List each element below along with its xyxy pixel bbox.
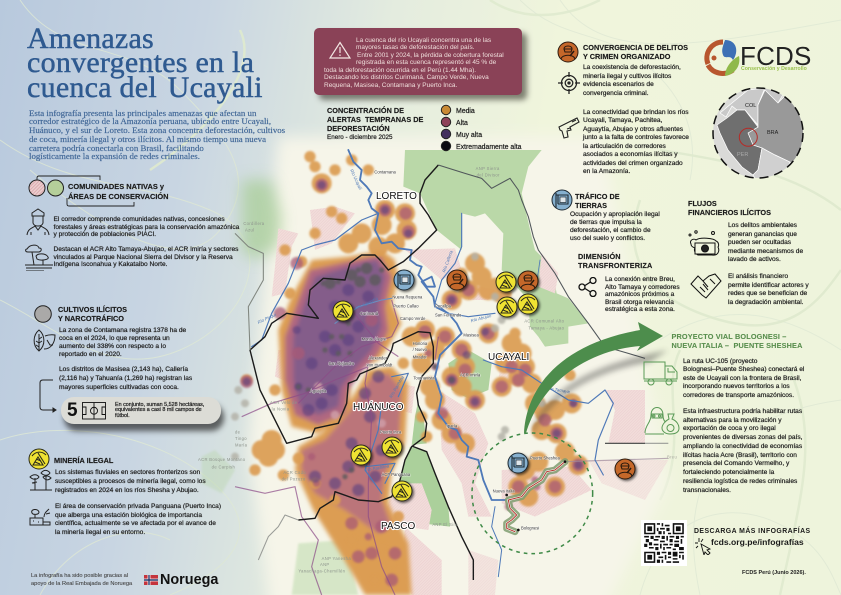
text: protected areas: Indígena Isconahua y Kakataibo Norte. (54, 261, 168, 268)
icon: cursor click (694, 537, 712, 555)
heading: CULTIVOS ILÍCITOS (58, 304, 127, 314)
map place labels: Iparía (447, 424, 458, 429)
text: infrastructure risks: exportación de coca y oro ilegal (683, 425, 776, 432)
heading: COMUNIDADES NATIVAS y (68, 182, 164, 191)
icon: handgun (558, 117, 580, 139)
region labels: LORETO (376, 191, 417, 202)
title (27, 22, 263, 104)
legend heading (327, 106, 424, 133)
dark grey clusters: extreme (298, 268, 452, 477)
alert surface (278, 250, 412, 595)
heading (688, 198, 771, 217)
panel: tráfico de tierras (550, 188, 670, 248)
text: land trafficking: Ocupación y apropiación ilegal (570, 210, 660, 218)
heading (58, 304, 127, 323)
intro text (29, 108, 285, 162)
text: sponsor: apoyo de la Real Embajada de Noruega (31, 580, 132, 586)
icon: indigenous person (26, 208, 50, 236)
text: cross-border: estratégica a esta zona. (605, 306, 675, 313)
map: deforestation alerts in the Ucayali basin: ANP (320, 562, 330, 567)
department borders (250, 165, 473, 580)
text: financial analysis: permite identificar actores y (728, 282, 809, 289)
intro text: de coca, minería ilegal y otros ilícitos. Al mismo tiempo una nueva (29, 134, 266, 144)
map: deforestation alerts in the Ucayali basin: Río Pachitea (364, 463, 390, 473)
panel: minería ilegal (28, 448, 221, 536)
markers: land trafficking (blue) (394, 270, 528, 473)
text: deforestation facts (324, 36, 504, 89)
map: deforestation alerts in the Ucayali basin: Tamaya - Abujao (528, 325, 565, 330)
logo mark (703, 38, 743, 78)
icon: football pitch (82, 402, 106, 420)
text: infrastructure risks: ampliando la conectividad de economías (683, 443, 802, 450)
rivers (252, 150, 613, 577)
text: infrastructure risks: ilícitas hacia Acre (Brasil), territorio con (683, 452, 797, 459)
panel: convergencia de delitos (558, 42, 689, 175)
map place labels: Contamana (374, 169, 397, 174)
panel: flujos financieros (685, 195, 835, 310)
text: laundering: lavado de activos. (728, 256, 781, 263)
icon: conservation station (30, 508, 50, 526)
text: infrastructure risks: presencia del Comando Vermelho, y (683, 460, 789, 467)
map place labels: San Fernando (435, 313, 462, 318)
text: Contamana (59, 327, 186, 358)
heading (583, 42, 688, 61)
text: deforestation facts: Requena, Masisea, Contamana y Puerto Inca. (324, 82, 457, 89)
text: cross-border: Alto Tamaya y corredores (605, 284, 680, 291)
legend: deforestation alerts (327, 104, 522, 152)
icon: overlapping circles with brackets (28, 176, 134, 206)
heading: MINERÍA ILEGAL (54, 456, 113, 464)
region labels (353, 191, 529, 532)
map place labels: Puerto Sheshea (530, 455, 560, 460)
heading: NUEVA ITALIA – PUENTE SHESHEA (672, 341, 802, 350)
map: deforestation alerts in the Ucayali basin: ACR Velo de (270, 400, 298, 405)
icon: truck (643, 361, 679, 387)
title: convergentes en la (27, 46, 254, 79)
base map tint (202, 137, 668, 595)
text: Contamana: La zona de Contamana registra 1378 ha de (59, 327, 186, 334)
icon: handshake (690, 273, 722, 299)
text: UC-105: Bolognesi–Puente Sheshea) conectará el (683, 366, 804, 373)
text: convergence (583, 64, 681, 97)
heading: PROYECTO VIAL BOLOGNESI – (672, 332, 786, 340)
text: infrastructure risks: transnacionales. (683, 487, 731, 494)
text: Panguana: que alberga una estación biológica de importancia (55, 512, 202, 518)
text: infrastructure risks: Esta infraestructura podría habilitar rutas (683, 408, 802, 415)
text: cross-border: La conexión entre Breu, (605, 276, 675, 283)
map: deforestation alerts in the Ucayali basin: de (235, 429, 241, 434)
text: cross-border (605, 276, 680, 314)
text: Contamana: aumento del 338% con respecto a lo (59, 343, 166, 350)
map place labels: ACP Panguana (382, 472, 411, 477)
text: convergence: minería ilegal y cultivos ilícitos (583, 73, 671, 80)
map: deforestation alerts in the Ucayali basin: Río Abujao (470, 313, 492, 323)
map place labels: Honoria (413, 341, 428, 346)
text: download heading: DESCARGA MÁS INFOGRAFÍAS (694, 528, 811, 534)
map: deforestation alerts in the Ucayali basin: ANP Yanesha (322, 556, 351, 561)
text: Contamana: coca en el 2024, lo que representa un (59, 335, 170, 342)
text: districts: Los distritos de Masisea (2,143 ha), Callería (59, 366, 188, 373)
text: total hectares: En conjunto, suman 5,528 hectáreas, (115, 402, 204, 408)
map place labels: Puerto Inca (380, 429, 402, 434)
map: deforestation alerts in the Ucayali basin: ANP El Sira (432, 522, 458, 527)
roads (235, 300, 668, 595)
legend heading: CONCENTRACIÓN DE (327, 106, 404, 114)
map: deforestation alerts in the Ucayali basin: Tingo (235, 436, 247, 441)
map place labels: San Alejandro (328, 361, 355, 366)
text: protected areas: Destacan el ACR Alto Tamaya-Abujao, el ACR Imiría y sectores (54, 246, 238, 253)
text: cross-border: Brasil otorga relevancia (605, 299, 674, 306)
map: deforestation alerts in the Ucayali basin: Azul (245, 228, 254, 233)
heading (672, 332, 802, 350)
legend date: Enero - diciembre 2025 (327, 134, 392, 141)
map: deforestation alerts in the Ucayali basin: Río Callería (441, 249, 454, 273)
text: protected areas: vinculados al Parque Nacional Sierra del Divisor y la Reserva (54, 254, 233, 261)
text: financial analysis: El análisis financiero (728, 273, 788, 280)
map place labels (310, 169, 560, 530)
legend labels: Alta (456, 120, 468, 126)
heading: FLUJOS (688, 198, 717, 208)
text: communities (53, 216, 240, 238)
region labels: HUÁNUCO (353, 400, 404, 413)
text: total hectares: fútbol. (115, 413, 130, 419)
logo wordmark: FCDS (740, 41, 812, 71)
text: connectivity: Aguaytía, Abujao y otros afluentes (583, 126, 683, 133)
Ucayali eastern frontier (235, 165, 668, 560)
text: UC-105: incorporando nuevos territorios a los (683, 383, 790, 390)
panel: comunidades nativas (25, 176, 240, 271)
text: Panguana: científica, actualmente se ve afectada por el avance de (55, 520, 216, 527)
text: infrastructure risks (683, 408, 802, 495)
map: deforestation alerts in the Ucayali basin: Río Tamaya (546, 385, 571, 394)
map: deforestation alerts in the Ucayali basin: Cordillera (243, 221, 265, 226)
map place labels: Campo Verde (400, 316, 426, 321)
purple clusters: muy alta (247, 185, 578, 490)
icon: land trafficking badge (551, 189, 573, 211)
map place labels: Nueva Requena (392, 294, 423, 299)
legend heading: ALERTAS TEMPRANAS DE (327, 115, 423, 124)
icon: target (558, 72, 580, 94)
text: Contamana: reportado en el 2020. (59, 351, 122, 358)
text: UC-105 (683, 358, 804, 400)
heading: ÁREAS DE CONSERVACIÓN (68, 192, 169, 201)
map: deforestation alerts in the Ucayali basin: del Pozuzo (282, 477, 306, 482)
icon: forest (25, 244, 53, 271)
map: regional locator (712, 87, 804, 179)
panel: proyecto vial (640, 330, 830, 495)
heading: DIMENSIÓN (578, 252, 621, 260)
text: laundering: pueden ser ocultadas (728, 239, 791, 246)
road: Bolognesi – Nueva Italia – Puerto Sheshea (507, 462, 565, 532)
text: connectivity: asociados a economías ilícitas y (583, 151, 678, 158)
text: deforestation facts: mayores tasas de deforestación del país. (356, 44, 475, 51)
heading: Y NARCOTRÁFICO (58, 314, 124, 323)
icon: grey circle (34, 305, 52, 323)
legend heading: DEFORESTACIÓN (327, 124, 390, 133)
panel: deforestation callout (314, 28, 522, 95)
heading: TRANSFRONTERIZA (578, 261, 652, 270)
text: cross-border: amazónicos próximos a (605, 291, 674, 298)
text: river mining: Los sistemas fluviales en sectores fronterizos son (55, 469, 200, 476)
icon: share network (578, 277, 598, 297)
title: Amenazas (27, 22, 154, 55)
heading: TIERRAS (575, 201, 607, 210)
map place labels: / Nuevo (413, 347, 428, 352)
map: deforestation alerts in the Ucayali basin: Breu (667, 454, 677, 459)
download call to action (690, 525, 815, 555)
map place labels: Alexander (368, 355, 388, 360)
text: total hectares: equivalentes a casi 8 mil campos de (115, 407, 202, 413)
number 5: 5 (67, 400, 78, 420)
text: connectivity: junto a la falta de controles favorece (583, 134, 689, 141)
text: sponsor (31, 572, 132, 586)
text: laundering: generan ganancias que (728, 231, 797, 238)
text: river mining (55, 469, 206, 494)
text: UC-105: La ruta UC-105 (proyecto (683, 358, 757, 364)
text: convergence: evidencia escenarios de (583, 81, 654, 88)
map place labels: Tournavista (413, 375, 435, 380)
heading: FINANCIEROS ILÍCITOS (688, 208, 771, 217)
map place labels: Monte Alegre (362, 337, 387, 342)
text: financial analysis: redes que se benefician de (728, 290, 807, 297)
map: regional locator: COL (745, 103, 756, 109)
map place labels: Bolognesi (521, 525, 539, 530)
heading (68, 182, 169, 201)
markers: mining (yellow) (333, 272, 538, 501)
arrow: road project to Brazil (524, 322, 668, 433)
text: Panguana: El área de conservación privada Panguana (Puerto Inca) (55, 503, 221, 510)
text: connectivity: en la Amazonía. (583, 168, 630, 175)
project area: dashed circle (472, 433, 593, 554)
arrow: bracket to football stat (40, 380, 57, 413)
legend swatches (440, 104, 452, 152)
text: laundering: mediante mecanismos de (728, 248, 803, 255)
text: protected areas (53, 246, 238, 268)
text: deforestation facts: Destacando los distritos Curimaná, Campo Verde, Nueva (324, 74, 489, 81)
map: regional locator: PER (737, 152, 748, 158)
text: infrastructure risks: provenientes de diversas zonas del país, (683, 434, 802, 441)
text: land trafficking (570, 210, 660, 242)
text: districts (59, 366, 192, 391)
heading (578, 252, 652, 271)
text: Panguana (55, 503, 221, 536)
title: cuenca del Ucayali (27, 71, 263, 104)
logo: FCDS (700, 38, 820, 78)
heading: TRÁFICO DE (575, 192, 620, 201)
text: communities: forestales y áreas estratégicas para la conservación amazónica (54, 224, 239, 231)
map place labels: Nueva Italia (493, 489, 515, 494)
text: river mining: registrados en 2024 en los ríos Shesha y Abujao. (55, 487, 199, 494)
text: UC-105: este de Ucayali con la frontera de Brasil, (683, 375, 801, 382)
legend labels: Muy alta (456, 132, 482, 138)
text: laundering (728, 222, 803, 265)
wordmark: Noruega (160, 572, 218, 588)
text: laundering: Los delitos ambientales (728, 222, 797, 229)
panel: cultivos ilícitos (34, 304, 228, 436)
text: infrastructure risks: alternativas para la movilización y (683, 417, 782, 424)
intro text: Esta infografía presenta las principales amenazas que afectan un (29, 108, 256, 118)
text: total hectares (114, 402, 204, 419)
map: deforestation alerts in the Ucayali basin: ACR Codo (283, 470, 306, 475)
text: connectivity: la articulación de corredores (583, 143, 666, 150)
text: districts: (2,116 ha) y Tahuanía (1,269 ha) registran las (59, 375, 192, 382)
region labels: UCAYALI (488, 352, 529, 363)
map place labels: Curimaná (360, 311, 379, 316)
text: deforestation facts: Entre 2001 y 2024, la pérdida de cobertura forestal (357, 52, 504, 59)
map place labels: Masisea (463, 333, 479, 338)
map: deforestation alerts in the Ucayali basin: ANP Sierra (476, 166, 500, 171)
map place labels: Puerto Callao (393, 303, 419, 308)
text: financial analysis: la degradación ambiental. (728, 299, 804, 306)
text: land trafficking: uso del suelo y conflictos. (570, 234, 645, 242)
heading (575, 192, 620, 210)
text: infrastructure risks: resiliencia logística de redes criminales (683, 478, 797, 485)
text: connectivity: La conectividad que brindan los ríos (583, 109, 689, 116)
map place labels: von Humboldt (367, 363, 393, 368)
map place labels: Pucallpa (435, 303, 452, 308)
map: deforestation alerts in the Ucayali basin: María (235, 443, 248, 448)
icon: Norwegian flag (144, 575, 158, 585)
intro text: logísticamente la expansión de redes criminales. (29, 151, 200, 161)
text: river mining: susceptibles a procesos de minería ilegal, como los (55, 478, 206, 485)
text: deforestation facts: La cuenca del río Ucayali concentra una de las (356, 36, 491, 44)
pale grey clusters (235, 257, 542, 457)
map: deforestation alerts in the Ucayali basin: ACR Comunal Alto (524, 318, 565, 323)
callout: football fields (61, 397, 221, 424)
QR code (641, 520, 687, 566)
legend labels: Media (456, 108, 475, 114)
text: connectivity (582, 109, 689, 175)
map: deforestation alerts in the Ucayali basin: la Novia (272, 407, 290, 412)
map: deforestation alerts in the Ucayali basin: Río Pachitea (388, 374, 405, 399)
pink clusters: alta (247, 185, 578, 580)
map: deforestation alerts in the Ucayali basin: Río Aguaytía (354, 296, 379, 311)
region labels: PASCO (381, 521, 415, 532)
text: communities: y protección de poblaciones PIACI. (54, 231, 156, 238)
text: land trafficking: deforestación, el cambio de (570, 226, 651, 234)
map place labels: Aguaytía (310, 389, 327, 394)
indigenous communities areas (272, 207, 668, 595)
map place labels: ACR Imiría (460, 373, 481, 378)
text: communities: El corredor comprende comunidades nativas, concesiones (54, 216, 225, 223)
text: url: fcds.org.pe/infografías (711, 537, 804, 547)
heading: CONVERGENCIA DE DELITOS (583, 42, 688, 52)
map: deforestation alerts in the Ucayali basin: Río Pisqui (257, 312, 278, 325)
icon: deforested trees (29, 470, 52, 490)
text: financial analysis (728, 273, 809, 308)
panel: dimensión transfronteriza (570, 250, 685, 318)
map place labels: Mirador (413, 354, 427, 359)
map: deforestation alerts in the Ucayali basin: del Divisor (477, 172, 500, 177)
legend labels (456, 107, 522, 150)
text: land trafficking: de tierras que impulsa la (570, 218, 642, 226)
text: connectivity: actividades del crimen organizado (583, 160, 683, 167)
icon: crime badge (558, 42, 578, 62)
text: sponsor: La infografía ha sido posible gracias al (31, 572, 128, 578)
intro text: corredor estratégico de la Amazonía peruana, ubicado entre Ucayali, (29, 116, 271, 126)
map: regional locator: BRA (767, 130, 779, 136)
logo subtitle: Conservación y Desarrollo (741, 66, 807, 72)
text: convergence: convergencia criminal. (583, 90, 649, 97)
text: UC-105: corredores de transporte amazónicos. (683, 392, 794, 399)
intro text: Huánuco, y el sur de Loreto. Esta zona concentra deforestación, cultivos (29, 125, 285, 135)
icon: mining badge (28, 448, 50, 470)
icon: coca leaf (34, 330, 56, 352)
map: deforestation alerts in the Ucayali basin: Río Ucayali (349, 168, 363, 191)
intro text: carretera podría conectarla con Brasil, facilitando (29, 143, 204, 153)
text: districts: mayores superficies cultivadas con coca. (59, 384, 179, 391)
text: convergence: La coexistencia de deforestación, (583, 64, 681, 71)
map: deforestation alerts in the Ucayali basin: ACR Bosque Montano (198, 457, 246, 462)
markers: organized crime (orange) (447, 270, 635, 479)
credit: FCDS date: FCDS Perú (Junio 2026). (742, 570, 806, 576)
credit: Norway (31, 572, 218, 588)
map: deforestation alerts in the Ucayali basin: Yanachaga-Chemillén (298, 569, 346, 574)
text: Panguana: la minería ilegal en su entorno. (55, 528, 145, 536)
icon: warning triangle (329, 42, 351, 59)
heading: Y CRIMEN ORGANIZADO (583, 52, 670, 61)
text: infrastructure risks: fortaleciendo potencialmente la (683, 469, 774, 476)
icon: money laundering (688, 229, 720, 259)
text: deforestation facts: toda la deforestación ocurrida en el Perú (1.44 Mha). (324, 67, 476, 74)
text: deforestation facts: registrada en esta cuenca representó el 45 % de (356, 59, 496, 66)
icon: masked figure with money bag (644, 403, 680, 435)
legend labels: Extremadamente alta (456, 144, 522, 150)
orange clusters: media (247, 157, 578, 580)
text: connectivity: Ucayali, Tamaya, Pachitea, (583, 117, 662, 124)
map: deforestation alerts in the Ucayali basin: de Carpish (212, 464, 235, 469)
deforestation alert heat clusters (235, 157, 578, 595)
